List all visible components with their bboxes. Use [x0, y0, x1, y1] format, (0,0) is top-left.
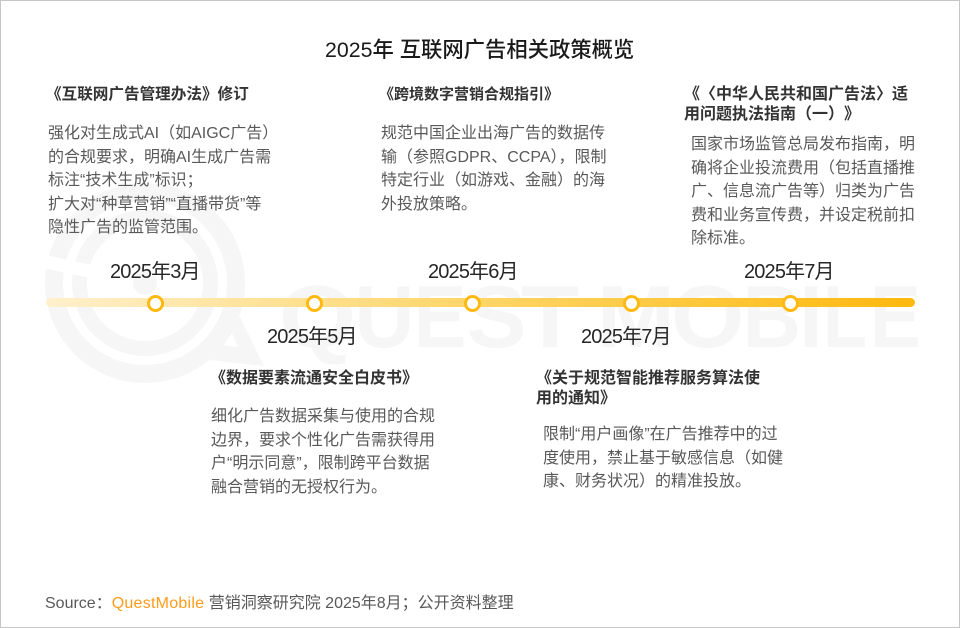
body text: 特定行业（如游戏、金融）的海 [381, 172, 605, 189]
timeline [46, 261, 915, 348]
heading: 《互联网广告管理办法》修订 [46, 86, 249, 103]
policy block: March 2025 [46, 86, 278, 236]
heading: 《数据要素流通安全白皮书》 [210, 370, 418, 387]
body text: 国家市场监管总局发布指南，明 [691, 136, 915, 153]
watermark: E [414, 267, 466, 366]
body text: 扩大对“种草营销”“直播带货”等 [48, 196, 261, 212]
watermark: Q [279, 267, 356, 366]
body text [381, 124, 606, 212]
date: 2025年3月: 2025年3月 [110, 261, 200, 283]
body text: 规范中国企业出海广告的数据传 [381, 125, 605, 142]
body text: 输（参照GDPR、CCPA），限制 [381, 148, 606, 166]
heading [684, 85, 908, 123]
date: 2025年7月 lower: 2025年7月 [581, 326, 671, 348]
policy block: July 2025 advertising law guide [684, 85, 915, 247]
watermark: U [354, 269, 414, 367]
body text: 除标准。 [691, 230, 755, 247]
body text: 康、财务状况）的精准投放。 [543, 473, 751, 490]
heading: 《关于规范智能推荐服务算法使 [536, 370, 760, 387]
body text: 标注“技术生成”标识； [48, 172, 203, 189]
body text [211, 407, 435, 496]
title: 2025年 互联网广告相关政策概览 [325, 38, 634, 62]
watermark: M [597, 269, 675, 366]
body text: 融合营销的无授权行为。 [211, 478, 387, 496]
body text: 外投放策略。 [381, 196, 477, 212]
date: 2025年6月: 2025年6月 [428, 261, 518, 283]
node 4 [623, 294, 640, 312]
watermark: E [870, 268, 921, 366]
body text: 限制“用户画像”在广告推荐中的过 [543, 426, 778, 443]
timeline bar [46, 298, 915, 307]
node 3 [464, 294, 481, 312]
policy block: July 2025 algorithm notice [536, 369, 783, 490]
policy block: May 2025 [210, 369, 435, 496]
node 1 [147, 294, 164, 312]
body text: 广、信息流广告等）归类为广告 [691, 183, 915, 200]
watermark: L [823, 268, 867, 367]
source note: Source：QuestMobile 营销洞察研究院 2025年8月；公开资料整理 [45, 595, 514, 612]
body text [48, 124, 278, 236]
body text: 度使用，禁止基于敏感信息（如健 [543, 450, 783, 466]
watermark: T [521, 268, 579, 366]
body text: 户“明示同意”，限制跨平台数据 [211, 455, 430, 472]
watermark: B [742, 267, 801, 366]
body text: 细化广告数据采集与使用的合规 [211, 408, 435, 425]
body text: 费和业务宣传费，并设定税前扣 [691, 206, 915, 224]
watermark: S [467, 268, 526, 366]
heading [536, 369, 760, 407]
body text: 强化对生成式AI（如AIGC广告） [48, 125, 278, 142]
watermark: O [671, 269, 744, 366]
date: 2025年5月: 2025年5月 [267, 326, 357, 348]
node 2 [306, 294, 322, 312]
node 5 [782, 294, 798, 312]
body text: 隐性广告的监管范围。 [48, 219, 208, 236]
policy block: June 2025 [379, 86, 606, 212]
body text [691, 135, 915, 247]
body text [543, 425, 783, 490]
body text: 边界，要求个性化广告需获得用 [211, 432, 435, 448]
heading: 用问题执法指南（一）》 [684, 106, 860, 123]
heading: 用的通知》 [536, 390, 616, 407]
body text: 的合规要求，明确AI生成广告需 [48, 148, 271, 166]
heading: 《〈中华人民共和国广告法〉适 [684, 86, 908, 103]
heading: 《跨境数字营销合规指引》 [379, 86, 559, 103]
watermark: I [799, 268, 823, 366]
date: 2025年7月 upper: 2025年7月 [744, 261, 834, 283]
body text: 确将企业投流费用（包括直播推 [691, 160, 915, 176]
